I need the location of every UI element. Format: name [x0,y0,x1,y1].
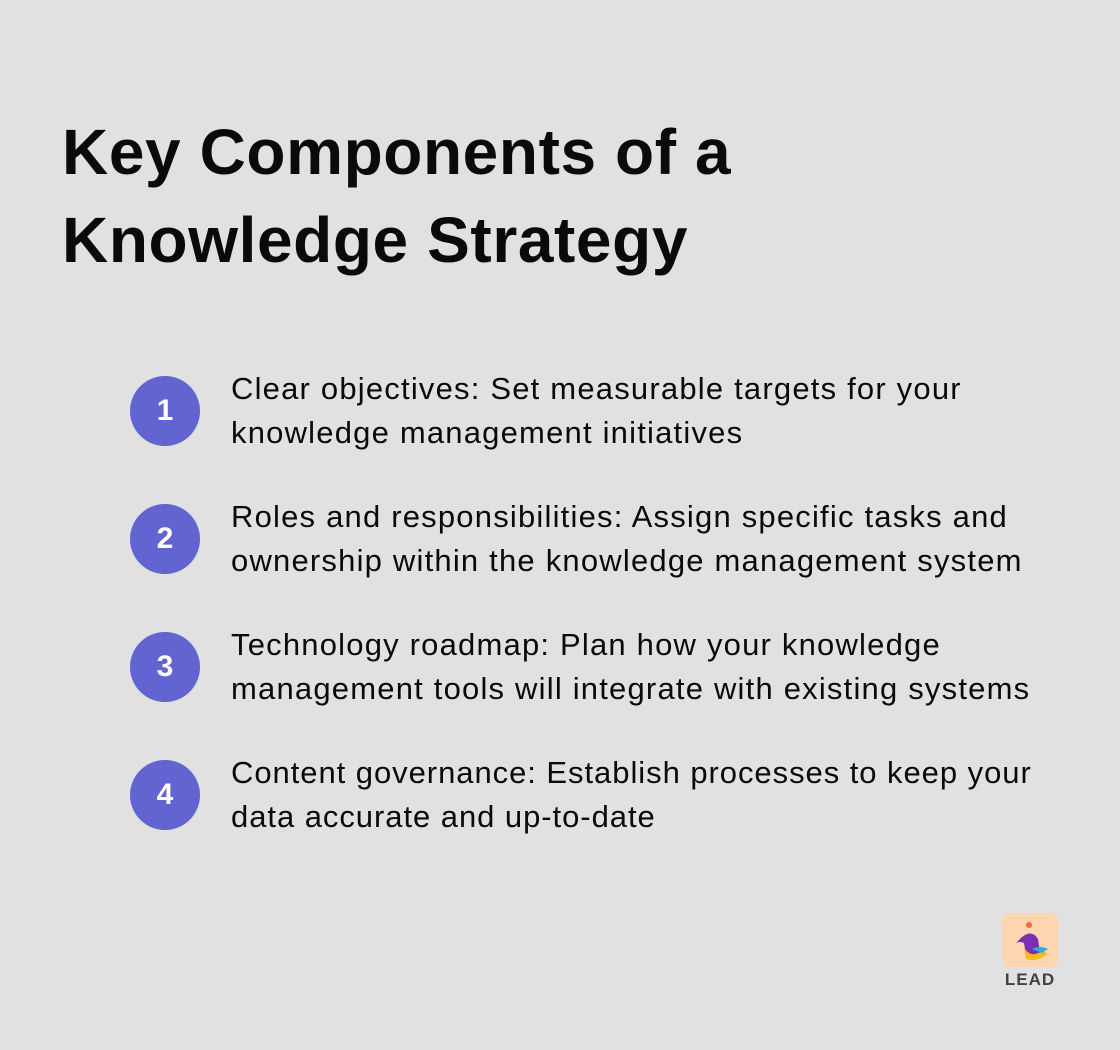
text 4: Content governance: Establish processes to keep your [231,755,1032,790]
badge 2 [130,504,200,574]
badge 2: 2 [157,522,173,555]
text 2: Roles and responsibilities: Assign specific tasks and [231,499,1008,534]
item 1 [130,371,962,450]
title: Key Components of a [62,116,731,188]
item 4 [130,755,1032,834]
badge 1 [130,376,200,446]
text 3 [231,627,1030,706]
badge 3 [130,632,200,702]
item 3 [130,627,1030,706]
text 1 [231,371,962,450]
badge 3: 3 [157,650,173,683]
title: Knowledge Strategy [62,204,688,276]
text 2 [231,499,1023,578]
logo [1002,913,1058,989]
item 2 [130,499,1023,578]
text 1: knowledge management initiatives [231,415,743,450]
title [62,116,731,276]
text 4 [231,755,1032,834]
badge 1: 1 [157,394,173,427]
text 4: data accurate and up-to-date [231,799,656,834]
logo icon [1002,913,1058,967]
text 1: Clear objectives: Set measurable targets for your [231,371,962,406]
badge 4: 4 [157,778,173,811]
badge 4 [130,760,200,830]
logo text: LEAD [1005,970,1055,989]
text 2: ownership within the knowledge management system [231,543,1023,578]
text 3: Technology roadmap: Plan how your knowledge [231,627,941,662]
text 3: management tools will integrate with existing systems [231,671,1030,706]
